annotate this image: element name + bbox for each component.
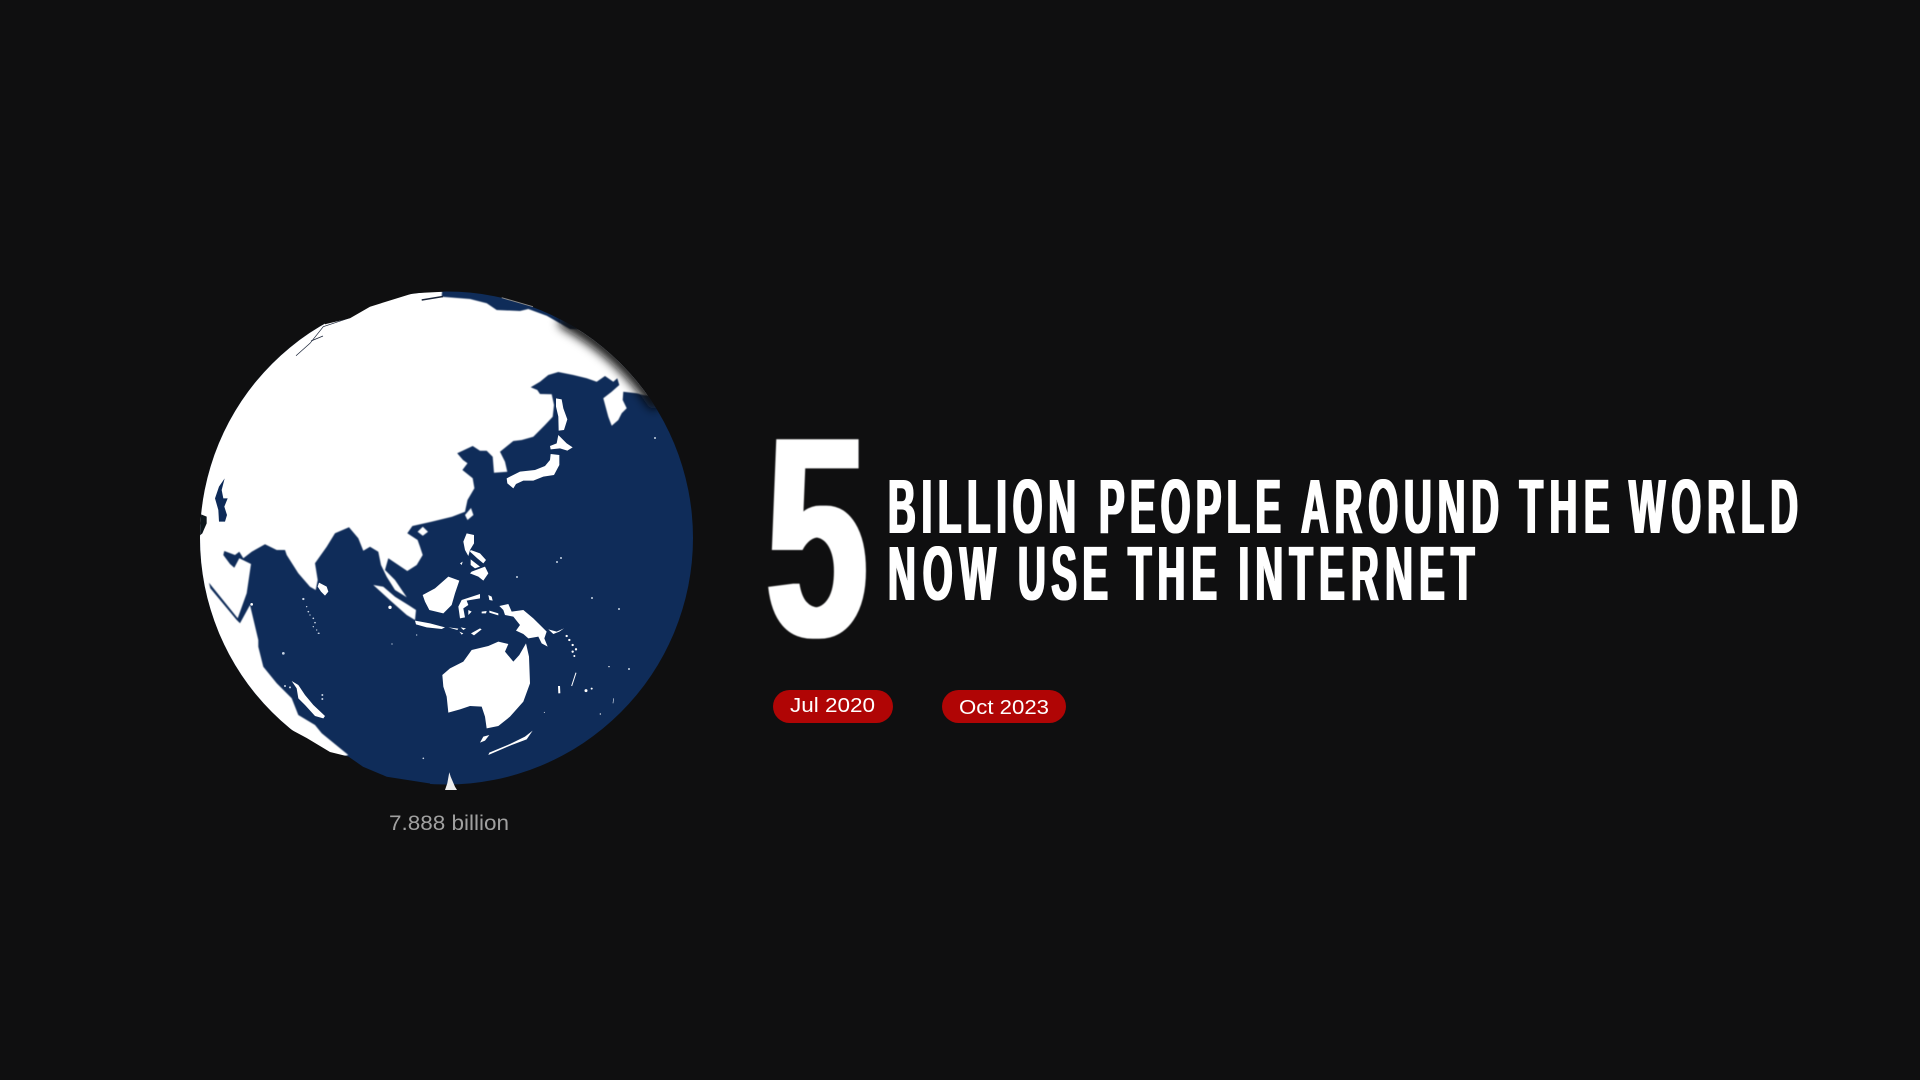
Taiwan: [465, 508, 473, 520]
headline line 1: [888, 463, 1798, 549]
Madagascar and nearby islands: [282, 633, 424, 759]
Madagascar: [292, 681, 325, 718]
headline line 2: [888, 530, 1474, 616]
Indian Ocean islands, Sri Lanka and Caspian group: [198, 478, 392, 634]
fine dark channels at the arctic coast: [296, 296, 443, 356]
globe land masses: [190, 280, 660, 760]
population label: 7.888 billion: [389, 812, 509, 835]
Bismarck islands: [548, 628, 564, 634]
date pill: Jul 2020: [773, 690, 893, 723]
date pill: Oct 2023: [942, 690, 1066, 723]
Tasmania: [480, 735, 489, 743]
headline line 2: INTERNET: [1238, 530, 1474, 616]
Sakhalin: [556, 398, 567, 431]
Caspian Sea: [215, 478, 228, 522]
Antarctica tip: [445, 772, 457, 790]
New Guinea: [499, 604, 548, 647]
south-east Asia islands: [415, 533, 564, 647]
limb cut upper left: [325, 270, 443, 324]
Maldives dots: [302, 598, 320, 634]
headline line 1: BILLION: [888, 463, 1076, 549]
Pacific islands: [544, 635, 614, 715]
Australia group: [442, 635, 614, 755]
limb shadow upper right: [566, 322, 654, 402]
Maluku islands: [482, 595, 498, 615]
arctic limb streak: [502, 298, 533, 307]
date pill: Jul 2020: Jul 2020: [790, 695, 875, 717]
Java and Lesser Sunda: [415, 621, 482, 635]
Luzon: [463, 533, 474, 556]
Sumatra: [373, 585, 416, 620]
small ocean islands: [282, 633, 424, 759]
headline line 1: THE: [1520, 463, 1610, 549]
headline line 1: WORLD: [1629, 463, 1798, 549]
headline line 1: PEOPLE: [1099, 463, 1281, 549]
Hainan: [418, 527, 428, 536]
Australia: [442, 642, 530, 728]
date pill: Oct 2023: Oct 2023: [959, 697, 1049, 719]
big number 5: 5: [766, 377, 868, 697]
Eurasia and Africa: [190, 280, 660, 760]
Hokkaido: [550, 435, 573, 451]
north-east Asia islands: [507, 398, 573, 488]
headline line 2: THE: [1128, 530, 1217, 616]
small Pacific dots: [516, 437, 656, 670]
headline line 2: NOW: [888, 530, 996, 616]
limb cut lower left: [272, 716, 430, 800]
Nias island: [388, 606, 392, 609]
Honshu, Shikoku and Kyushu: [507, 454, 559, 488]
Socotra: [250, 603, 253, 606]
Sri Lanka: [318, 583, 328, 596]
headline line 1: AROUND: [1301, 463, 1499, 549]
Borneo: [423, 577, 459, 613]
globe: [190, 270, 693, 800]
Visayas and Mindanao: [460, 550, 488, 581]
Sulawesi: [458, 594, 480, 618]
headline: [888, 463, 1798, 616]
Black Sea edge: [200, 514, 207, 536]
headline line 2: USE: [1018, 530, 1108, 616]
New Zealand: [488, 731, 533, 755]
globe ocean: [200, 292, 693, 784]
